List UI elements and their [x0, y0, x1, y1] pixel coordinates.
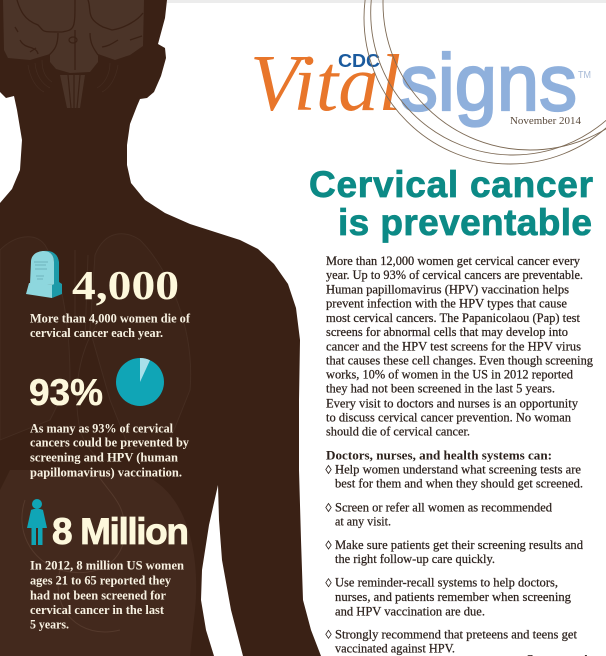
list item: screen or refer	[326, 501, 552, 529]
list item: recommend vaccination: Strongly recommend that preteens and teens get	[335, 627, 578, 641]
list item: reminder-recall systems	[326, 576, 571, 619]
description	[30, 558, 184, 631]
intro paragraph: cancer and the HPV test screens for the HPV virus	[326, 339, 581, 353]
description: cancers could be prevented by	[30, 436, 189, 450]
list item: help women understand	[326, 462, 583, 491]
stat: 8 million unscreened	[27, 499, 189, 631]
description	[30, 422, 189, 480]
intro paragraph: works, 10% of women in the US in 2012 reported	[326, 368, 573, 382]
intro paragraph: they had not been screened in the last 5 years.	[326, 382, 555, 396]
number: 93%	[29, 372, 103, 413]
list item: screening results	[326, 538, 583, 566]
title: is preventable	[338, 202, 592, 243]
action list	[326, 462, 583, 655]
description: 5 years.	[30, 617, 69, 631]
list item: reminder-recall systems: and HPV vaccination are due.	[335, 605, 485, 619]
description: screening and HPV (human	[30, 451, 178, 465]
list item: screening results: the right follow-up care quickly.	[335, 552, 495, 566]
intro paragraph: More than 12,000 women get cervical cancer every	[326, 254, 581, 268]
list item: reminder-recall systems: Use reminder-recall systems to help doctors,	[335, 576, 558, 590]
number: 4,000	[72, 262, 179, 308]
list item: help women understand: best for them and when they should get screened.	[335, 477, 583, 491]
description: More than 4,000 women die of	[30, 312, 191, 326]
issue date: November 2014	[510, 116, 582, 127]
decorative rings	[364, 0, 606, 164]
brain stem and cranial nerves	[28, 60, 118, 108]
description: cervical cancer each year.	[30, 326, 163, 340]
list item: recommend vaccination: vaccinated against HPV.	[335, 641, 455, 655]
section heading: doctors, nurses, health systems: Doctors, nurses, and health systems can:	[326, 448, 552, 462]
intro paragraph: that causes these cell changes. Even though screening	[326, 353, 593, 367]
icon: woman	[27, 499, 47, 545]
stat: 4,000 deaths	[26, 251, 191, 340]
stat: 93% preventable	[29, 358, 189, 480]
list item: recommend vaccination	[326, 627, 578, 655]
intro paragraph: screens for abnormal cells that may develop into	[326, 325, 568, 339]
description: In 2012, 8 million US women	[30, 558, 184, 572]
number: 8 Million	[52, 511, 189, 552]
brain illustration	[3, 0, 144, 73]
CDC Vital Signs logo	[250, 0, 606, 164]
intro paragraph: Every visit to doctors and nurses is an opportunity	[326, 396, 579, 410]
pie chart: 93 percent	[116, 358, 164, 406]
description: ages 21 to 65 reported they	[30, 573, 171, 587]
description	[30, 312, 191, 340]
lungs, heart and abdominal organs	[0, 234, 196, 656]
description: had not been screened for	[30, 588, 167, 602]
silhouette of a woman's body	[0, 0, 321, 656]
list item: screen or refer: at any visit.	[335, 515, 391, 529]
intro paragraph	[326, 254, 593, 439]
intro paragraph: should die of cervical cancer.	[326, 425, 470, 439]
description: papillomavirus) vaccination.	[30, 466, 182, 480]
intro paragraph: most cervical cancers. The Papanicolaou (Pap) test	[326, 311, 581, 325]
description: cervical cancer in the last	[30, 603, 164, 617]
trademark: TM	[578, 70, 591, 81]
logo label: CDC: CDC	[338, 51, 380, 71]
list item: help women understand: Help women understand what screening tests are	[335, 462, 581, 476]
description: As many as 93% of cervical	[30, 422, 174, 436]
list item: screening results: Make sure patients get their screening results and	[335, 538, 583, 552]
icon: tombstone	[26, 251, 62, 298]
logo word: Vital: Vital	[250, 38, 401, 128]
list item: screen or refer: Screen or refer all women as recommended	[335, 501, 552, 515]
logo word: signs: signs	[400, 38, 577, 127]
list item: reminder-recall systems: nurses, and patients remember when screening	[335, 590, 571, 604]
title: Cervical cancer	[309, 164, 593, 205]
title	[309, 164, 593, 243]
intro paragraph: prevent infection with the HPV types that cause	[326, 297, 567, 311]
intro paragraph: to discuss cervical cancer prevention. No woman	[326, 411, 571, 425]
intro paragraph: Human papillomavirus (HPV) vaccination helps	[326, 282, 569, 296]
intro paragraph: year. Up to 93% of cervical cancers are preventable.	[326, 268, 583, 282]
